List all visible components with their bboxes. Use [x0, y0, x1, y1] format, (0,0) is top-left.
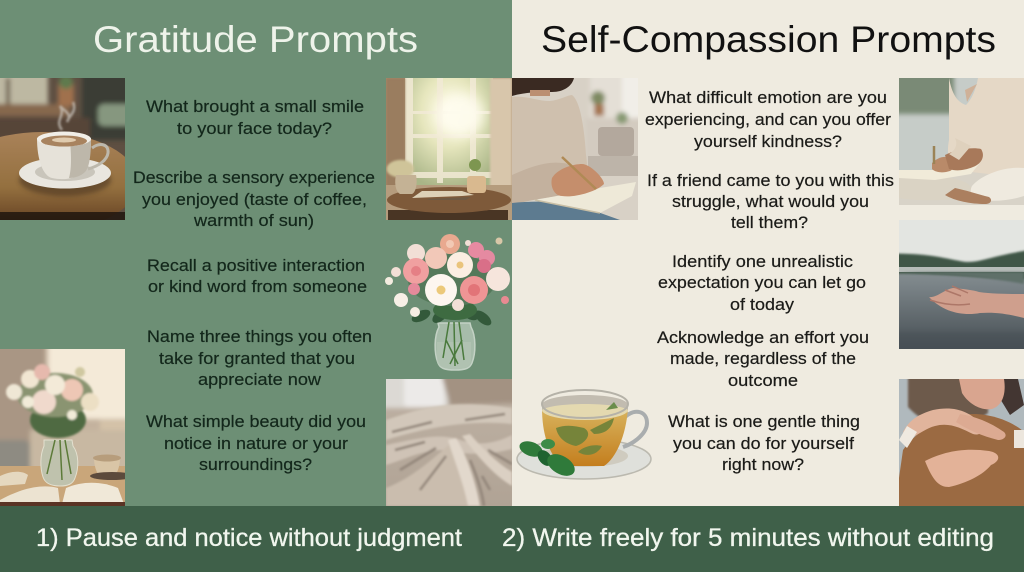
prompt 4 [657, 328, 869, 390]
prompt 3: of today [730, 295, 795, 314]
photo: bouquet in vase with open book [0, 349, 125, 506]
mint leaves [517, 438, 578, 480]
prompt 5: notice in nature or your [164, 434, 348, 453]
prompt 3: Identify one unrealistic [672, 252, 853, 271]
photo: open hands over a still lake [899, 220, 1024, 349]
prompt 3 [147, 256, 367, 296]
blossoms [385, 234, 510, 317]
prompt 5: right now? [722, 455, 804, 474]
prompt 2 [133, 168, 375, 230]
prompt 1: experiencing, and can you offer [645, 110, 891, 129]
prompt 5: you can do for yourself [673, 434, 854, 453]
footer step 2: 2) Write freely for 5 minutes without editing [502, 524, 994, 552]
prompt 4: outcome [728, 371, 798, 390]
prompt 2: Describe a sensory experience [133, 168, 375, 187]
prompt 3: Recall a positive interaction [147, 256, 365, 275]
prompt 3: or kind word from someone [148, 277, 367, 296]
prompt 5 [146, 412, 366, 474]
leaves [408, 254, 496, 328]
prompt 5: What simple beauty did you [146, 412, 366, 431]
prompt 2 [647, 171, 894, 232]
panel: self-compassion background [512, 0, 1024, 506]
prompt 1: yourself kindness? [694, 132, 842, 151]
illustration: glass cup of herbal tea with mint on saucer [517, 390, 651, 480]
title: Self-Compassion Prompts: Self-Compassion Prompts [541, 19, 996, 60]
prompt 5: What is one gentle thing [668, 412, 860, 431]
prompt 4: made, regardless of the [670, 349, 856, 368]
photo: person in sweater writing in notebook [512, 78, 638, 220]
prompt 4: take for granted that you [159, 349, 355, 368]
prompt 4: appreciate now [198, 370, 322, 389]
prompt 4 [147, 327, 372, 389]
cup handle [623, 412, 647, 447]
prompt 1: What brought a small smile [146, 97, 364, 116]
prompt 1 [645, 88, 891, 151]
prompts: gratitude [133, 97, 375, 474]
prompt 2: warmth of sun) [193, 211, 314, 230]
prompt 4: Acknowledge an effort you [657, 328, 869, 347]
cup body with tea [542, 408, 628, 466]
prompts: self-compassion [645, 88, 894, 474]
photo: cross-legged person journaling by a lake [899, 78, 1024, 205]
panel: gratitude background [0, 0, 512, 506]
photo: sunlit window with flowers and table [386, 78, 512, 220]
photo: two people embracing [899, 370, 1024, 506]
prompt 2: struggle, what would you [672, 192, 869, 211]
footer step 1: 1) Pause and notice without judgment [36, 524, 462, 552]
prompt 1: to your face today? [177, 119, 332, 138]
title: Gratitude Prompts: Gratitude Prompts [93, 19, 418, 60]
footer band [0, 506, 1024, 572]
prompt 5 [668, 412, 860, 474]
prompt 5: surroundings? [199, 455, 312, 474]
prompt 2: tell them? [731, 213, 808, 232]
photo: coffee cup on wooden table [0, 78, 125, 220]
prompt 2: you enjoyed (taste of coffee, [142, 190, 367, 209]
prompt 3 [658, 252, 866, 314]
prompt 2: If a friend came to you with this [647, 171, 894, 190]
prompt 4: Name three things you often [147, 327, 372, 346]
prompt 1 [146, 97, 364, 138]
illustration: pink and white flower bouquet in glass vase [385, 234, 510, 370]
photo: soft beige blanket on bed [386, 379, 512, 506]
vase [435, 322, 475, 370]
saucer [517, 439, 651, 479]
prompt 1: What difficult emotion are you [649, 88, 887, 107]
prompt 3: expectation you can let go [658, 273, 866, 292]
